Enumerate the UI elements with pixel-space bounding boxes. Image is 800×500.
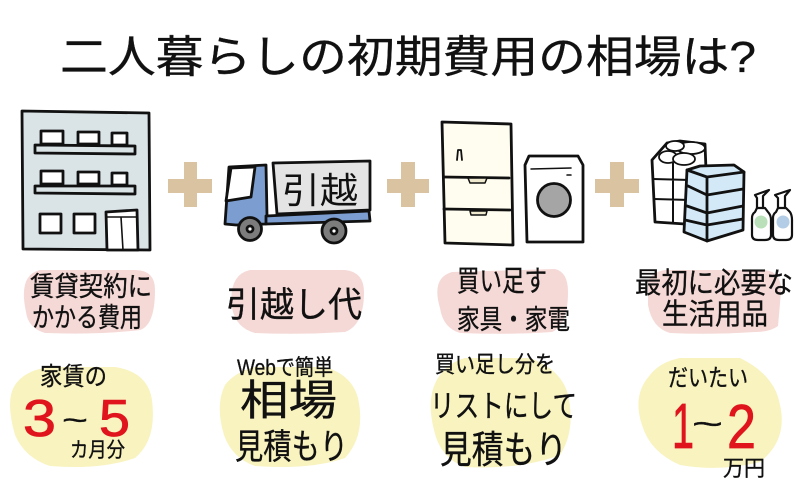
panel: estimate amount: ~: [692, 406, 723, 442]
panel: web estimate: 相場: [240, 377, 337, 424]
icon: moving truck: 引越: [282, 170, 358, 211]
panel: label rental contract costs: かかる費用: [32, 303, 142, 333]
panel: estimate rent months: カ月分: [70, 439, 125, 462]
panel: list estimate: 買い足し分を: [435, 351, 555, 377]
panel: label daily necessities: 生活用品: [662, 298, 768, 331]
icon: pump bottles: [752, 190, 792, 240]
panel: estimate rent months: 3: [23, 390, 56, 448]
panel: label daily necessities: [635, 267, 793, 334]
panel: web estimate: Webで簡単: [237, 355, 333, 380]
panel: label furniture and appliances: 買い足す: [457, 266, 547, 298]
icon: washing machine: [525, 156, 583, 242]
icon: plus 3: [595, 162, 639, 207]
panel: label rental contract costs: 賃貸契約に: [30, 272, 152, 302]
panel: label rental contract costs: [24, 270, 155, 334]
panel: label furniture and appliances: 家具・家電: [457, 305, 570, 335]
panel: estimate rent months: 5: [99, 390, 130, 448]
panel: estimate rent months: ~: [62, 404, 88, 437]
title: 二人暮らしの初期費用の相場は?: [60, 33, 756, 82]
panel: web estimate: 見積もり: [235, 428, 348, 467]
icon: plus 2: [387, 162, 429, 207]
panel: estimate amount: 万円: [723, 456, 765, 481]
panel: label moving cost: 引越し代: [226, 286, 362, 325]
icon: toilet paper rolls: [652, 141, 706, 225]
icon: plus 1: [168, 162, 212, 207]
panel: web estimate: [220, 355, 360, 467]
panel: estimate amount: 2: [727, 393, 756, 462]
panel: estimate rent months: [10, 363, 153, 467]
panel: estimate amount: [638, 358, 782, 481]
panel: list estimate: リストにして: [430, 389, 577, 424]
icon: refrigerator: [442, 122, 513, 245]
panel: list estimate: 見積もり: [440, 430, 567, 472]
panel: estimate rent months: 家賃の: [40, 363, 107, 391]
panel: label furniture and appliances: [437, 266, 570, 335]
icon: tissue box stack: [684, 165, 744, 241]
panel: estimate amount: 1: [672, 390, 694, 462]
panel: estimate amount: だいたい: [668, 365, 748, 392]
panel: list estimate: [430, 351, 577, 472]
icon: moving truck: [225, 161, 370, 243]
icon: apartment building: [22, 111, 150, 250]
panel: label moving cost: [226, 270, 364, 334]
